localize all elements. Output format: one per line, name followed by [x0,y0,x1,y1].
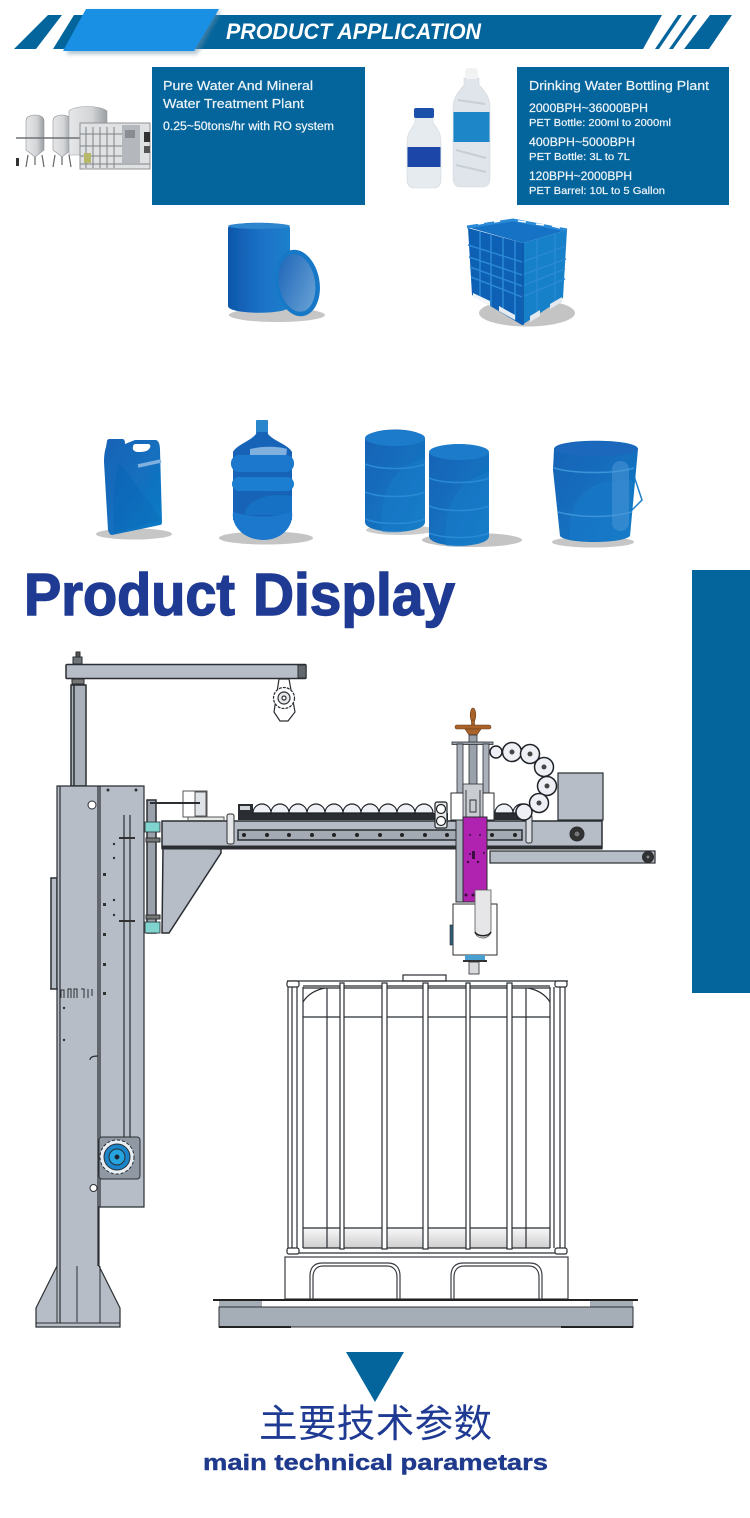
icon: IBC tote container [467,220,575,326]
icon: two steel drums [365,430,522,547]
icon: small water bottle [407,108,441,188]
icon: water treatment plant [16,106,150,169]
panel text: bottling ranges: PET Bottle: 3L to 7L [529,151,630,163]
icon: open drum with lid [228,223,325,322]
pulley [274,679,295,721]
panel text: bottling ranges [529,78,709,197]
arrow: pointing down [346,1352,404,1402]
control box [558,773,603,820]
cable drag chain on rail [238,742,556,828]
icon: 5 gallon water jug [219,420,313,544]
panel text: pure water: 0.25~50tons/hr with RO system [163,121,334,133]
panel: water treatment plant [152,67,365,205]
main column [36,786,144,1327]
panel text: bottling ranges: 2000BPH~36000BPH [529,101,648,115]
heading: english parameters title: main technical parametars [203,1450,548,1475]
heading: product display: Product [24,562,235,628]
icon: large water bottle [453,68,490,187]
banner: product application [14,9,732,54]
panel: bottling plant [517,67,729,205]
heading: chinese parameters title: 主要技术参数 [259,1403,492,1446]
hand wheel [455,708,491,735]
panel text: pure water: Pure Water And Mineral [163,78,313,93]
panel text: pure water: Water Treatment Plant [163,96,304,111]
weighing platform [213,1299,638,1328]
icon: pail with handle [552,441,642,548]
rotating roller with cyan bearings [145,800,160,933]
panel text: bottling ranges: PET Barrel: 10L to 5 Gallon [529,185,665,197]
panel text: bottling ranges: 400BPH~5000BPH [529,135,635,149]
gearmotor [99,1137,140,1179]
lower belt bar [490,851,655,863]
banner heading: PRODUCT APPLICATION [226,19,482,44]
heading: product display: Display [253,562,455,628]
icon: jerrycan [96,439,172,540]
pallet [285,1257,568,1299]
panel text: bottling ranges: 120BPH~2000BPH [529,169,632,183]
horizontal arm and gusset [162,814,602,933]
decorative blue side panel [692,570,750,993]
panel text: bottling ranges: Drinking Water Bottling Plant [529,78,709,93]
filling head carriage [450,708,497,974]
IBC tank cage [287,975,568,1254]
diagram: filling machine [36,652,655,1328]
panel text: bottling ranges: PET Bottle: 200ml to 2000ml [529,117,671,129]
heading: product display [24,562,455,628]
panel text: pure water [163,78,334,133]
drive motor bracket [150,791,224,820]
crane top arm [66,652,306,786]
